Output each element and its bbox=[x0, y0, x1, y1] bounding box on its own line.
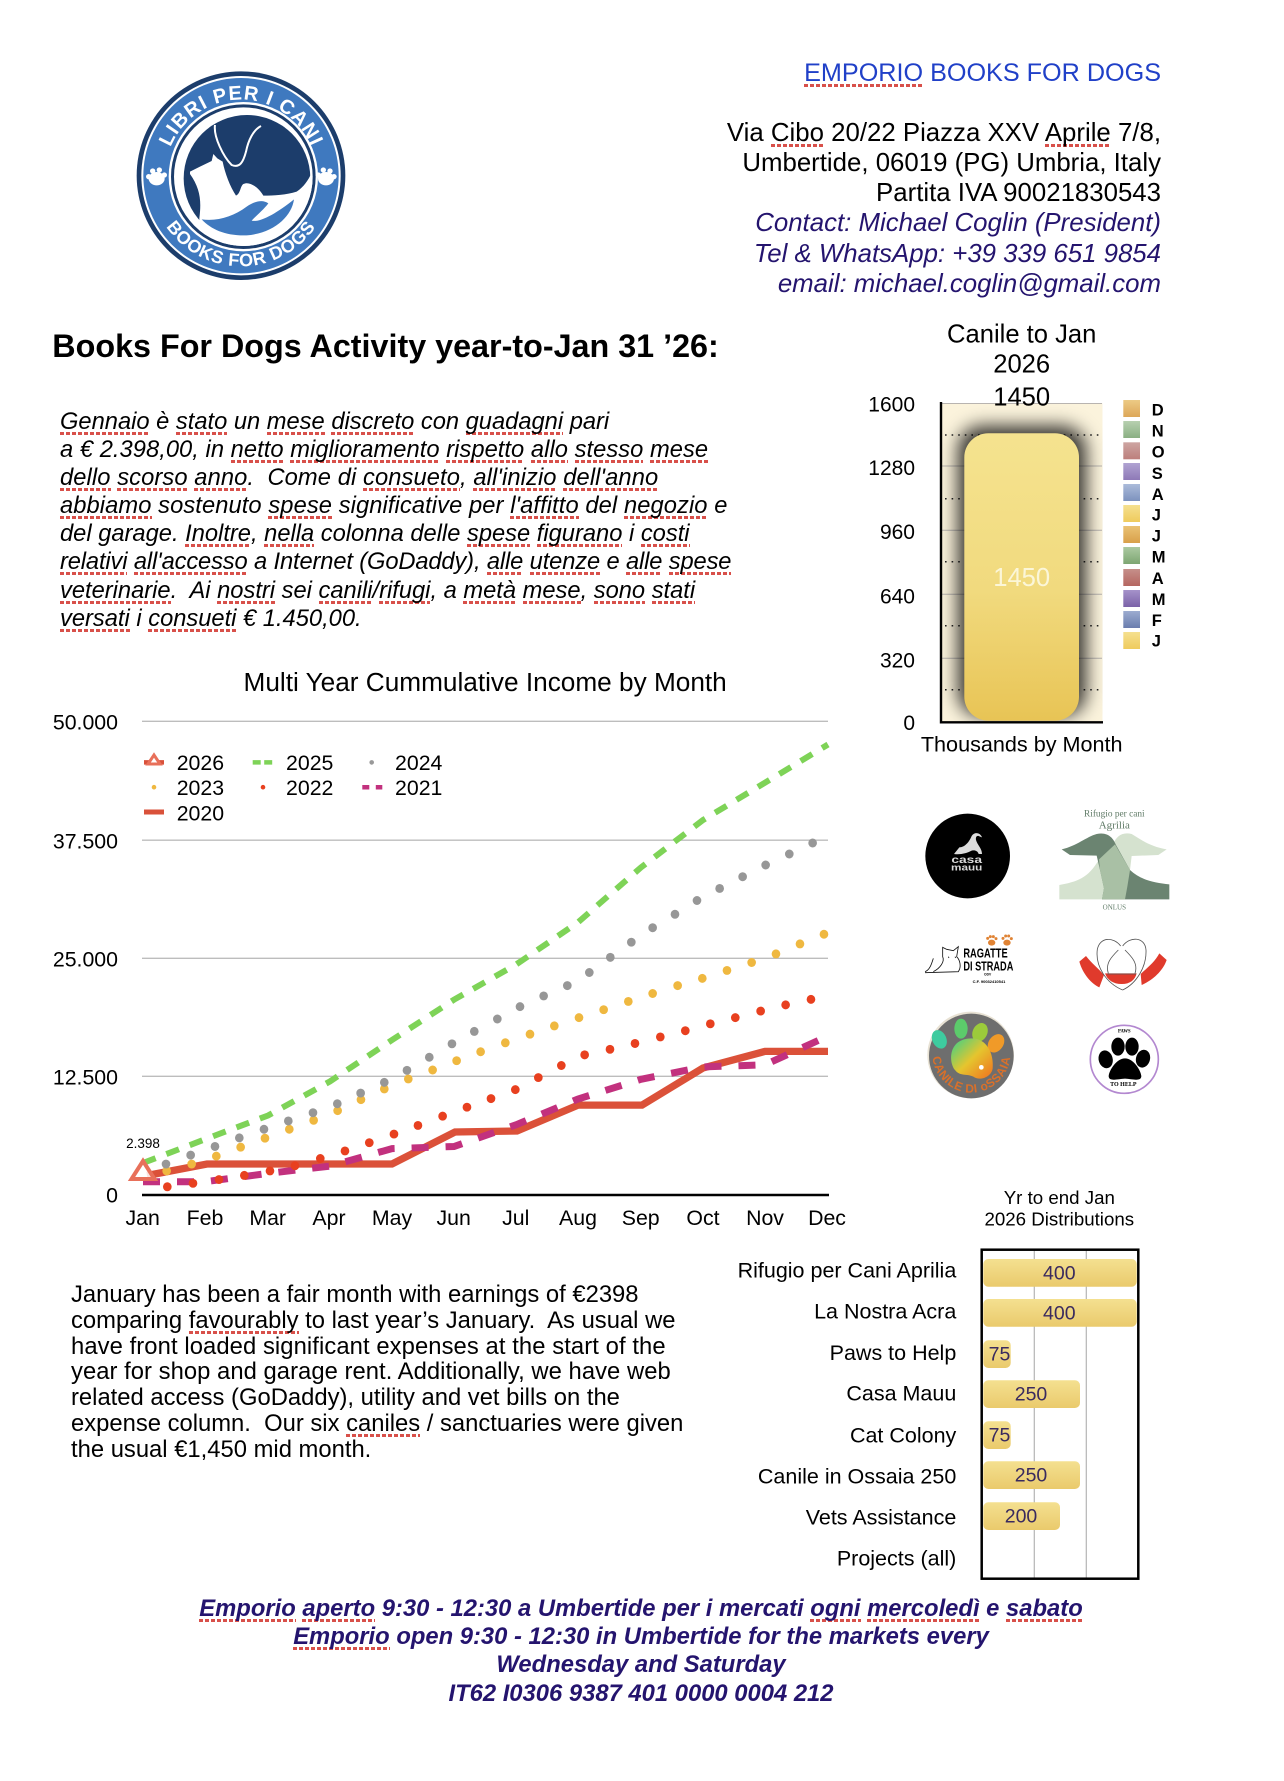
logo: Casa Mauu: mauu bbox=[951, 862, 982, 872]
category labels: Projects (all) bbox=[837, 1547, 956, 1571]
legend: J bbox=[1152, 633, 1161, 651]
text block: English summary: have front loaded significant expenses at the start of the bbox=[71, 1333, 666, 1360]
header: address and contact: Umbertide, 06019 (PG) Umbria, Italy bbox=[742, 149, 1161, 177]
logo: Libri per i Cani / Books for Dogs: LIBRI PER I CANI bbox=[158, 86, 324, 146]
category labels: Paws to Help bbox=[830, 1341, 956, 1365]
panel: partner shelter logos bbox=[924, 809, 1170, 1098]
chart title: 2026 Distributions bbox=[985, 1209, 1134, 1230]
chart title bbox=[985, 1187, 1134, 1230]
legend: D bbox=[1152, 402, 1164, 420]
legend: J bbox=[1152, 528, 1161, 546]
category labels: Casa Mauu bbox=[846, 1382, 956, 1406]
logo: Canile di Ossaia: CANILE DI oSSAIA bbox=[933, 1056, 1010, 1093]
y axis labels bbox=[868, 394, 915, 735]
legend: O bbox=[1152, 444, 1165, 462]
x axis month labels: Sep bbox=[622, 1206, 660, 1230]
x axis month labels: Jan bbox=[126, 1206, 160, 1230]
logo: Casa Mauu: casa bbox=[951, 855, 982, 866]
text block: Italian summary: veterinarie. Ai nostri sei canili/rifugi, a metà mese, sono stati bbox=[60, 578, 695, 604]
text block: Italian summary bbox=[60, 409, 731, 632]
series: 2025 bbox=[143, 744, 828, 1163]
text block: English summary: year for shop and garage rent. Additionally, we have web bbox=[71, 1358, 671, 1385]
logo: Casa Mauu bbox=[925, 814, 1010, 898]
footer: opening hours and IBAN: Wednesday and Saturday bbox=[496, 1651, 786, 1678]
legend: A bbox=[1152, 486, 1164, 504]
category labels: La Nostra Acra bbox=[814, 1300, 956, 1324]
chart title: 1450 bbox=[993, 384, 1050, 412]
column chart: Canile to Jan 2026 bbox=[868, 320, 1165, 757]
series: 2026 marker with value bbox=[126, 1136, 160, 1179]
text block: English summary: expense column. Our six caniles / sanctuaries were given bbox=[71, 1410, 683, 1437]
bar shadow bbox=[958, 426, 1086, 716]
header: address and contact: Contact: Michael Coglin (President) bbox=[755, 209, 1161, 237]
category labels: Canile in Ossaia 250 bbox=[758, 1464, 956, 1488]
series: 2023 bbox=[162, 930, 828, 1175]
gridlines and y axis labels: 12.500 bbox=[53, 1065, 118, 1089]
legend: 2021 bbox=[395, 776, 442, 800]
series: 2026 marker with value: 2.398 bbox=[126, 1136, 160, 1151]
gridlines and y axis labels: 37.500 bbox=[53, 829, 118, 853]
gridlines and y axis labels: 50.000 bbox=[53, 711, 118, 735]
series: 2024 bbox=[162, 838, 817, 1169]
axes bbox=[940, 402, 1103, 724]
x axis month labels: Mar bbox=[249, 1206, 286, 1230]
y axis labels: 1600 bbox=[868, 394, 915, 417]
logo: Rifugio per cani Agrilia: Rifugio per cani bbox=[1084, 809, 1145, 820]
bars with values: 400 bbox=[1043, 1302, 1076, 1324]
header: address and contact bbox=[727, 119, 1161, 298]
logo: Rifugio per cani Agrilia: Agrilia bbox=[1099, 820, 1130, 832]
series: 2021 bbox=[143, 1036, 828, 1182]
category labels bbox=[738, 1259, 957, 1571]
text block: English summary bbox=[71, 1281, 683, 1463]
footer: opening hours and IBAN bbox=[199, 1595, 1083, 1707]
chart title: 2026 bbox=[993, 351, 1050, 379]
bars with values: 200 bbox=[1005, 1506, 1037, 1528]
category labels: Cat Colony bbox=[850, 1424, 957, 1448]
title: Books For Dogs Activity year-to-Jan 31 ’26: bbox=[52, 328, 719, 364]
x axis month labels: May bbox=[372, 1206, 412, 1230]
x axis title: Thousands by Month bbox=[921, 732, 1123, 757]
footer: opening hours and IBAN: IT62 I0306 9387 401 0000 0004 212 bbox=[448, 1680, 834, 1707]
logo: Rifugio per cani Agrilia: ONLUS bbox=[1103, 903, 1126, 911]
logo: Ragatte di Strada bbox=[925, 934, 1014, 984]
gridlines and y axis labels: 0 bbox=[106, 1183, 118, 1207]
text block: English summary: comparing favourably to last year’s January. As usual we bbox=[71, 1307, 676, 1334]
footer: opening hours and IBAN: Emporio aperto 9:30 - 12:30 a Umbertide per i mercati ogni mercoledì e sabato bbox=[199, 1595, 1083, 1622]
category labels: Rifugio per Cani Aprilia bbox=[738, 1259, 956, 1283]
legend: S bbox=[1152, 465, 1163, 483]
gridlines and y axis labels: 25.000 bbox=[53, 948, 118, 972]
logo: Canile di Ossaia bbox=[927, 1012, 1014, 1098]
legend bbox=[144, 751, 443, 826]
chart title bbox=[947, 320, 1096, 412]
y axis labels: 1280 bbox=[868, 457, 915, 480]
series: 2022 bbox=[163, 995, 815, 1191]
bars with values: 75 bbox=[989, 1343, 1010, 1365]
text block: Italian summary: versati i consueti € 1.450,00. bbox=[60, 606, 362, 632]
header: address and contact: Partita IVA 90021830543 bbox=[876, 179, 1161, 207]
x axis month labels: Jun bbox=[437, 1206, 471, 1230]
x axis month labels: Jul bbox=[502, 1206, 529, 1230]
legend: 2023 bbox=[177, 776, 224, 800]
logo: Ragatte di Strada: DI STRADA bbox=[963, 958, 1014, 973]
y axis labels: 0 bbox=[903, 712, 915, 735]
legend: N bbox=[1152, 423, 1164, 441]
gridlines and y axis labels bbox=[53, 711, 829, 1207]
x axis month labels: Aug bbox=[559, 1206, 597, 1230]
legend: F bbox=[1152, 612, 1162, 630]
logo: Libri per i Cani / Books for Dogs bbox=[136, 71, 346, 280]
x axis month labels bbox=[126, 1206, 846, 1230]
logo: Libri per i Cani / Books for Dogs: BOOKS FOR DOGS bbox=[166, 220, 314, 266]
text block: English summary: January has been a fair month with earnings of €2398 bbox=[71, 1281, 639, 1308]
text block: Italian summary: Gennaio è stato un mese discreto con guadagni pari bbox=[60, 409, 609, 435]
logo: Paws to Help: PAWS bbox=[1118, 1030, 1131, 1035]
y axis labels: 960 bbox=[880, 521, 915, 544]
logo: Ragatte di Strada: ODV bbox=[984, 972, 992, 976]
legend: 2024 bbox=[395, 751, 443, 775]
chart title: Canile to Jan bbox=[947, 320, 1096, 348]
logo: Paws to Help bbox=[1090, 1025, 1158, 1093]
legend bbox=[1123, 400, 1165, 651]
bars with values: 75 bbox=[989, 1425, 1010, 1447]
bar: January 1450 bbox=[964, 433, 1079, 721]
category labels: Vets Assistance bbox=[806, 1506, 956, 1530]
footer: opening hours and IBAN: Emporio open 9:30 - 12:30 in Umbertide for the markets every bbox=[293, 1623, 989, 1650]
text block: Italian summary: relativi all'accesso a Internet (GoDaddy), alle utenze e alle spese bbox=[60, 549, 731, 575]
y axis labels: 320 bbox=[880, 649, 915, 672]
bar chart: distributions bbox=[738, 1187, 1140, 1580]
logo: Ragatte di Strada: C.F. 90032410541 bbox=[973, 979, 1006, 984]
text block: English summary: related access (GoDaddy), utility and vet bills on the bbox=[71, 1384, 620, 1411]
x axis month labels: Oct bbox=[686, 1206, 720, 1230]
series: 2020 bbox=[147, 1051, 828, 1176]
x axis month labels: Dec bbox=[808, 1206, 846, 1230]
legend: J bbox=[1152, 507, 1161, 525]
x axis month labels: Feb bbox=[187, 1206, 223, 1230]
legend: 2025 bbox=[286, 751, 333, 775]
x axis month labels: Nov bbox=[746, 1206, 784, 1230]
logo: Rifugio per cani Agrilia bbox=[1059, 809, 1169, 911]
bars with values: 400 bbox=[1043, 1262, 1076, 1284]
x axis month labels: Apr bbox=[312, 1206, 346, 1230]
text block: English summary: the usual €1,450 mid month. bbox=[71, 1436, 371, 1463]
header: address and contact: Via Cibo 20/22 Piazza XXV Aprile 7/8, bbox=[727, 119, 1161, 147]
text block: Italian summary: abbiamo sostenuto spese significative per l'affitto del negozio e bbox=[60, 493, 728, 519]
header: address and contact: Tel & WhatsApp: +39 339 651 9854 bbox=[754, 240, 1161, 268]
legend: 2022 bbox=[286, 776, 333, 800]
text block: Italian summary: dello scorso anno. Come di consueto, all'inizio dell'anno bbox=[60, 465, 658, 491]
text block: Italian summary: a € 2.398,00, in netto miglioramento rispetto allo stesso mese bbox=[60, 437, 708, 463]
bar: January 1450: 1450 bbox=[993, 564, 1050, 592]
legend: M bbox=[1152, 549, 1165, 567]
y axis labels: 640 bbox=[880, 585, 915, 608]
logo: Ragatte di Strada: RAGATTE bbox=[963, 946, 1008, 961]
bars with values bbox=[983, 1259, 1137, 1530]
legend: A bbox=[1152, 570, 1164, 588]
chart title: Multi Year Cummulative Income by Month bbox=[244, 667, 727, 697]
bars with values: 250 bbox=[1015, 1465, 1047, 1487]
logo: Paws to Help: TO HELP bbox=[1110, 1082, 1137, 1088]
bars with values: 250 bbox=[1015, 1384, 1047, 1406]
line chart: multi year cumulative income bbox=[53, 667, 846, 1230]
legend: 2020 bbox=[177, 802, 224, 826]
header: address and contact: email: michael.coglin@gmail.com bbox=[778, 270, 1161, 298]
legend: 2026 bbox=[177, 751, 224, 775]
legend: M bbox=[1152, 591, 1165, 609]
logo: red ribbon with wings bbox=[1079, 939, 1167, 990]
chart title: Yr to end Jan bbox=[1004, 1187, 1115, 1208]
text block: Italian summary: del garage. Inoltre, nella colonna delle spese figurano i costi bbox=[60, 521, 690, 547]
plot frame and grid bbox=[982, 1250, 1138, 1579]
plot background and grid bbox=[942, 403, 1103, 721]
header: organisation name: EMPORIO BOOKS FOR DOGS bbox=[804, 59, 1161, 87]
